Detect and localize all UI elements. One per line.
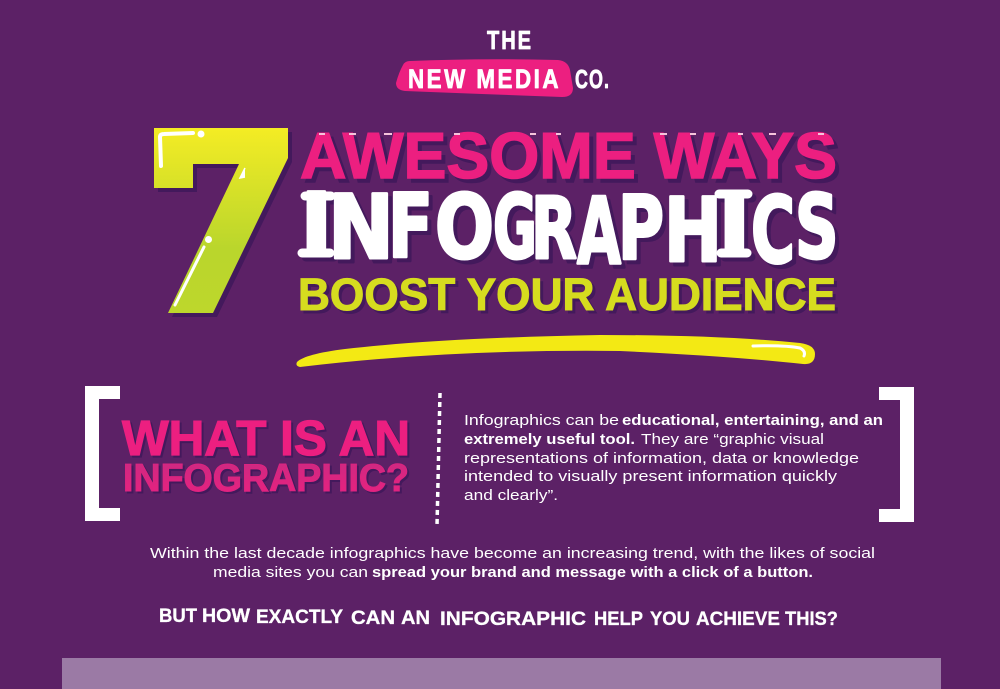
question heading: EXACTLY: [256, 606, 343, 628]
big numeral 7: [154, 128, 292, 317]
trend paragraph: spread your brand and message with a click of a button.: [372, 564, 813, 581]
question heading: CAN: [351, 607, 395, 629]
intro paragraph: educational, entertaining, and an: [622, 412, 883, 429]
question heading: HOW: [202, 605, 251, 627]
intro paragraph: representations of information, data or knowledge: [464, 450, 859, 467]
dotted divider: [437, 393, 440, 526]
question heading: AN: [401, 607, 430, 629]
title line: Infographics: F: [388, 175, 433, 278]
title line: Infographics: O: [435, 176, 494, 279]
intro paragraph: Infographics can be: [464, 412, 619, 429]
title line: Infographics: I: [718, 174, 751, 277]
title line: Infographics: G: [493, 176, 537, 279]
trend paragraph: [150, 545, 875, 581]
title line: Infographics: [300, 174, 838, 285]
lilac panel top edge: [62, 658, 941, 689]
question heading: ACHIEVE: [696, 608, 780, 630]
heading: What is an Infographic?: WHAT IS AN: [122, 412, 410, 466]
question heading: BUT: [159, 605, 197, 627]
left bracket: [85, 386, 120, 521]
question heading: INFOGRAPHIC: [440, 608, 586, 630]
title line: Infographics: P: [618, 177, 664, 280]
question heading: [159, 605, 838, 630]
logo: The New Media Co.: NEW MEDIA: [408, 64, 561, 94]
intro paragraph: They are “graphic visual: [641, 431, 824, 448]
title line: Boost Your Audience: BOOST YOUR AUDIENCE: [298, 269, 836, 320]
trend paragraph: media sites you can: [213, 564, 368, 581]
heading: What is an Infographic?: [122, 412, 410, 500]
title line: Infographics: C: [751, 177, 795, 284]
intro paragraph: extremely useful tool.: [464, 431, 635, 448]
question heading: THIS?: [785, 608, 838, 630]
title line: Infographics: S: [795, 176, 838, 279]
title line: Awesome Ways: AWESOME WAYS: [300, 119, 837, 192]
yellow brush swoosh: [296, 335, 815, 367]
title line: Infographics: N: [328, 176, 394, 279]
intro paragraph: [464, 412, 883, 504]
question heading: YOU: [650, 608, 690, 630]
logo: The New Media Co.: [396, 25, 610, 97]
question heading: HELP: [594, 608, 643, 630]
title line: Infographics: I: [300, 174, 333, 277]
logo: The New Media Co.: THE: [487, 25, 533, 55]
intro paragraph: intended to visually present information quickly: [464, 468, 838, 485]
intro paragraph: and clearly”.: [464, 487, 558, 504]
right bracket: [879, 387, 914, 522]
trend paragraph: Within the last decade infographics have become an increasing trend, with the likes of social: [150, 545, 875, 562]
title line: Infographics: R: [531, 180, 577, 279]
logo: The New Media Co.: CO.: [575, 64, 610, 94]
title line: Infographics: H: [664, 179, 722, 282]
title line: Infographics: A: [577, 178, 621, 285]
heading: What is an Infographic?: INFOGRAPHIC?: [123, 457, 409, 500]
